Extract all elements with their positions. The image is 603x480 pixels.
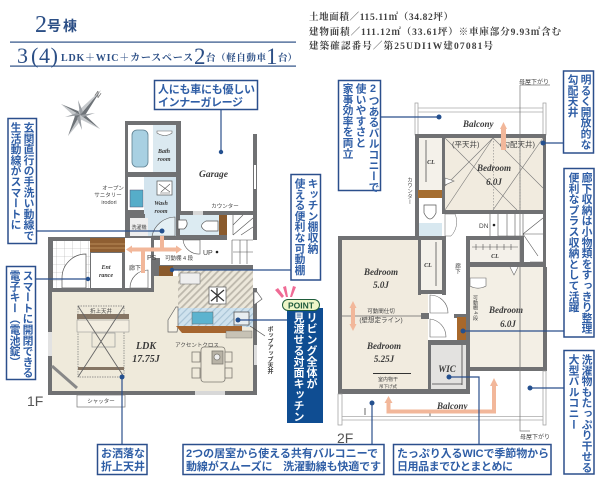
icon: compass rose <box>61 89 103 136</box>
callout: sloped ceiling: 勾配天井 <box>566 73 578 118</box>
coffered ceiling and sofa: 折上天井 <box>90 307 112 315</box>
left bedrooms: Bedroom <box>366 341 401 351</box>
left bedrooms: 5.0J <box>373 280 389 290</box>
walk-in closet <box>338 340 470 394</box>
callout: electronic key: スマートに開閉できる <box>21 270 33 378</box>
bottom balcony: Balcony <box>436 401 469 411</box>
floor label 2F: 2F <box>337 430 353 446</box>
callout: sloped ceiling: 明るく開放的な <box>579 74 591 150</box>
callout: coffered ceiling <box>98 374 147 474</box>
floor plan: 2F <box>337 78 550 446</box>
bedroom partition arrow <box>350 301 356 331</box>
LDK room: 17.75J <box>132 354 161 365</box>
callout: two balconies: 家事効率を両立 <box>341 82 353 159</box>
callout: two balconies <box>338 80 442 192</box>
callout: electronic key <box>6 266 90 380</box>
callout: two balconies: 使いやすさと <box>354 82 366 148</box>
bathroom: room <box>157 157 171 163</box>
callout: entrance hand wash: 生活動線がスマートに <box>9 121 21 230</box>
wash room: room <box>154 209 168 215</box>
callout: walk-in closet: たっぷり入るWICで季節物から <box>397 446 549 460</box>
callout: hallway storage: 廊下収納は小物類をすっきり整理 <box>580 171 592 334</box>
callout: entrance hand wash <box>8 118 164 244</box>
corridor <box>442 236 470 393</box>
callout: shared balcony: 2つの居室から使える共有バルコニーで <box>186 446 378 460</box>
corridor: 廊下 <box>454 262 461 275</box>
kitchen <box>168 270 253 349</box>
toilet room: カウンター <box>211 202 239 210</box>
layout summary heading: 2 <box>194 44 206 69</box>
upper bedroom: (勾配天井) <box>500 139 535 149</box>
layout summary heading <box>10 42 297 69</box>
door symbol and pop-up ceiling label <box>250 292 273 375</box>
entrance hall: 廊下 <box>129 264 141 272</box>
property specifications: 建物面積／111.12㎡（33.61坪）※車庫部分9.93㎡含む <box>309 26 561 38</box>
callout: hallway storage <box>460 168 594 337</box>
upper bedroom: 6.0J <box>486 177 502 187</box>
left bedrooms: CL <box>424 263 432 269</box>
icon: pink emphasis marks <box>275 286 296 298</box>
bathroom <box>125 121 181 178</box>
left bedrooms: 吊下げ式 <box>379 383 397 390</box>
callout: entrance hand wash: 玄関直行の手洗い動線で <box>22 121 34 241</box>
floor plan: 1F <box>27 121 273 409</box>
right bedroom: 6.0J <box>500 319 516 329</box>
building title <box>35 12 77 38</box>
dining set <box>192 347 232 382</box>
corridor flow arrows <box>126 236 182 273</box>
building title: 号棟 <box>47 18 77 34</box>
top balcony: Balcony <box>462 119 495 129</box>
balcony-bedroom arrow <box>500 122 507 150</box>
layout summary heading: 台（軽自動車 <box>206 52 266 64</box>
entrance hall: rance <box>99 273 113 279</box>
LDK room <box>48 276 257 395</box>
bottom balcony <box>338 371 546 425</box>
pipe space and adjustable shelf: 可動棚 4 段 <box>165 254 194 262</box>
callout: hallway storage: 便利なプラス収納として活躍 <box>567 172 579 313</box>
property specifications: 土地面積／115.11㎡（34.82坪） <box>309 11 453 23</box>
callout: large balcony: 大型バルコニー <box>567 353 579 430</box>
left bedrooms: 5.25J <box>374 354 395 364</box>
upper bedroom <box>415 134 546 270</box>
property specifications <box>309 11 561 52</box>
open sanitary label: オープン <box>102 185 124 192</box>
property specifications: 建築確認番号／第25UDI1W建07081号 <box>309 40 493 52</box>
eave lines and labels: 母屋下がり <box>520 433 550 441</box>
callout: inner garage: インナーガレージ <box>158 95 243 109</box>
callout: large balcony <box>528 350 594 474</box>
staircase down <box>479 214 543 262</box>
upper bedroom: (平天井) <box>452 139 480 149</box>
callout: large balcony: 洗濯物もたっぷり干せる <box>580 353 592 473</box>
entrance hall <box>48 237 154 292</box>
closet near stairs: CL <box>491 254 499 260</box>
door symbol and pop-up ceiling label: ポップアップ天井 <box>266 326 273 375</box>
callout: two balconies: 2つあるバルコニーで <box>367 83 379 192</box>
callout: point face-to-face kitchen: 見渡せる対面キッチン <box>292 312 304 422</box>
right bedroom: Bedroom <box>488 305 523 315</box>
callout: shared balcony <box>183 400 384 474</box>
shutter: シャッター <box>87 397 115 405</box>
left bedrooms: Bedroom <box>363 267 398 277</box>
callout: point face-to-face kitchen: リビング全体が <box>305 312 318 389</box>
top balcony <box>415 103 546 135</box>
eave lines and labels <box>519 78 550 441</box>
balcony flow arrow <box>384 378 498 412</box>
layout summary heading: (4) <box>31 43 58 68</box>
left bedrooms <box>338 236 466 394</box>
open sanitary label: サニタリー <box>94 191 122 199</box>
open sanitary label <box>94 185 124 206</box>
callout: coffered ceiling: お洒落な <box>101 446 145 460</box>
upper bedroom: Bedroom <box>476 163 511 173</box>
wash room: 洗濯機 <box>131 224 147 231</box>
callout: point face-to-face kitchen: POINT <box>288 300 315 310</box>
toilet room <box>176 202 257 240</box>
shutter <box>77 395 125 407</box>
kitchen: アクセントクロス <box>175 342 219 349</box>
walk-in closet: WIC <box>438 364 457 374</box>
right bedroom <box>454 267 547 371</box>
pipe space and adjustable shelf: PS <box>147 255 157 262</box>
layout summary heading: LDK＋WIC＋カースペース <box>61 52 193 64</box>
callout: coffered ceiling: 折上天井 <box>101 459 145 473</box>
callout: kitchen shelf: キッチン棚収納 <box>306 178 318 254</box>
icon: compass rose: N <box>93 89 103 100</box>
callout: walk-in closet <box>394 374 551 474</box>
callout: walk-in closet: 日用品までひとまとめに <box>397 460 513 473</box>
callout: kitchen shelf: 使える便利な可動棚 <box>293 177 305 276</box>
left bedrooms: (壁想定ライン) <box>359 315 403 324</box>
wash room: Wash <box>154 201 168 207</box>
staircase down: DN <box>479 223 489 230</box>
open sanitary label: irodori <box>101 200 117 206</box>
left bedrooms: 室内物干 <box>378 376 398 383</box>
floor label 1F: 1F <box>27 393 43 409</box>
wash room <box>125 176 181 240</box>
LDK room: LDK <box>135 341 157 352</box>
upper toilet: カウンター <box>406 177 413 204</box>
callout: sloped ceiling <box>540 71 594 153</box>
callout: inner garage <box>154 80 258 154</box>
coffered ceiling and sofa <box>77 306 129 377</box>
callout: shared balcony: 動線がスムーズに 洗濯動線も快適です <box>186 459 381 473</box>
layout summary heading: 台） <box>278 52 297 64</box>
callout: inner garage: 人にも車にも優しい <box>158 82 255 96</box>
entrance hall: Ent <box>100 265 111 271</box>
eave lines and labels: 母屋下がり <box>519 78 549 86</box>
garage: Garage <box>199 170 229 180</box>
building title: 2 <box>35 12 47 38</box>
bathroom: Bath <box>157 149 171 155</box>
layout summary heading: 3 <box>17 43 28 68</box>
upper toilet <box>406 177 457 237</box>
staircase up: UP <box>203 250 213 257</box>
callout: kitchen shelf <box>170 174 320 280</box>
layout summary heading: 1 <box>266 44 278 69</box>
upper bedroom: CL <box>427 160 435 166</box>
left bedrooms: 可動間仕切 <box>367 307 395 315</box>
pipe space and adjustable shelf <box>147 254 253 291</box>
callout: electronic key: 電子キー（電池錠） <box>8 270 20 367</box>
garage <box>180 134 257 214</box>
right bedroom: 可動棚 4 段 <box>472 295 478 322</box>
closet near stairs <box>466 236 546 267</box>
callout: point face-to-face kitchen <box>236 286 323 423</box>
staircase up <box>183 215 253 265</box>
